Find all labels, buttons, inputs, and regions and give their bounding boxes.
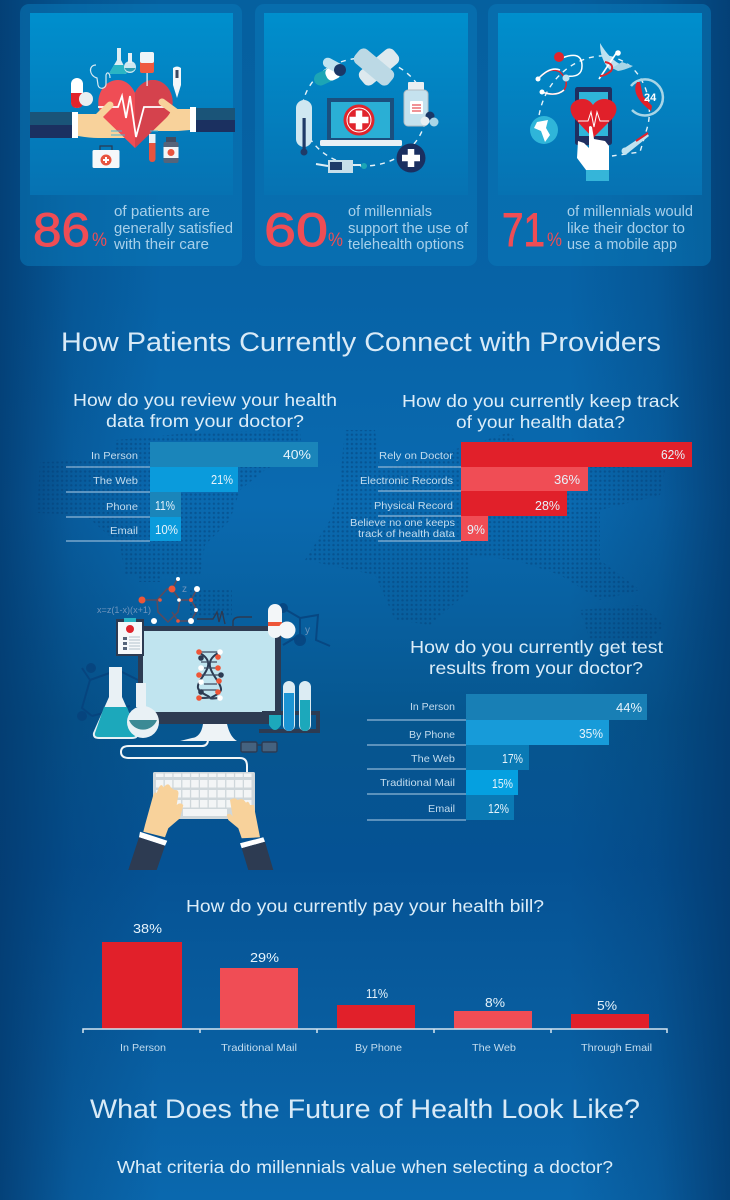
- chart: review health data: 10%: [155, 522, 178, 537]
- icon: pointing hand: [577, 126, 609, 181]
- icon: stethoscope: [90, 65, 110, 88]
- icon: bottle: [404, 82, 438, 126]
- icon: capsule and tablet: [268, 604, 296, 638]
- icon: thermometer: [622, 133, 649, 154]
- text: millennials telehealth: of millennials: [348, 204, 432, 220]
- chart: pay health bill: 5%: [597, 998, 617, 1013]
- text: millennials mobile app: of millennials would: [567, 204, 693, 220]
- icon: DNA helix: [196, 649, 224, 701]
- chart title: of your health data?: [456, 412, 625, 432]
- icon: thermometer: [173, 66, 181, 98]
- icon: test tube rack: [259, 681, 320, 733]
- text: millennials mobile app: like their doctor to: [567, 221, 685, 237]
- chart title: [410, 637, 663, 678]
- chart: get test results: Traditional Mail: [380, 777, 455, 789]
- icon: test tube: [149, 134, 156, 162]
- chart: get test results: 35%: [579, 726, 603, 741]
- chart: pay health bill: In Person: [120, 1042, 166, 1054]
- chart title: results from your doctor?: [429, 658, 643, 678]
- icon: plus badge: [396, 144, 426, 172]
- chart: keep track of health data: Believe no one keeps: [350, 517, 455, 529]
- chart title: How do you currently get test: [410, 637, 663, 657]
- icon: stethoscope: [536, 52, 582, 94]
- chart: review health data: 11%: [155, 498, 175, 513]
- icon: conical flask: [93, 667, 138, 739]
- chart: review health data: In Person: [91, 450, 138, 462]
- panel: mobile app: [488, 4, 711, 266]
- icon: phone with heart: [571, 87, 616, 145]
- chart: keep track of health data: Electronic Records: [360, 475, 453, 487]
- icon: first aid kit: [92, 146, 120, 168]
- chart: get test results: 15%: [492, 776, 513, 791]
- icon: left hand and sleeve: [128, 784, 183, 870]
- chart: keep track of health data: [350, 391, 692, 541]
- panel: telehealth: [255, 4, 477, 266]
- dotted world map: [37, 430, 665, 650]
- chart: keep track of health data: 36%: [554, 472, 580, 487]
- chart: pay health bill: The Web: [472, 1042, 516, 1054]
- chart: get test results: In Person: [410, 701, 455, 713]
- stat: 71%: %: [547, 230, 562, 251]
- chart: get test results: [367, 637, 663, 820]
- chart: pay health bill: By Phone: [355, 1042, 402, 1054]
- text: millennials telehealth: telehealth options: [348, 237, 464, 253]
- icon: flasks: [110, 48, 136, 74]
- text: patients satisfied: generally satisfied: [114, 221, 233, 237]
- chart: review health data: Email: [110, 525, 138, 537]
- text: millennials mobile app: [567, 204, 693, 253]
- chart: get test results: The Web: [411, 753, 455, 765]
- chart: review health data: [66, 390, 337, 541]
- stat: 86%: %: [92, 230, 107, 251]
- panel: satisfied patients: [20, 4, 242, 266]
- chart: pay health bill: 38%: [133, 921, 162, 936]
- icon: 24h phone: 24: [644, 92, 657, 104]
- chart: pay health bill: 11%: [366, 986, 388, 1001]
- icon: telehealth ring: [296, 46, 438, 173]
- chart: review health data: Phone: [106, 501, 138, 513]
- text: patients satisfied: of patients are: [114, 204, 210, 220]
- chart title: [402, 391, 679, 432]
- chart: keep track of health data: 28%: [535, 498, 560, 513]
- stat: 60%: [264, 203, 343, 256]
- chart: get test results: 12%: [488, 801, 509, 816]
- illustration: computer with lab equipment: [78, 577, 330, 870]
- subheading: millennial criteria: What criteria do millennials value when selecting a doctor?: [117, 1157, 613, 1177]
- chart title: [73, 390, 337, 431]
- icon: monitor: [138, 626, 281, 741]
- chart: pay health bill: 8%: [485, 995, 505, 1010]
- icon: molecule: [138, 577, 200, 624]
- axis letter y: y: [305, 625, 310, 636]
- chart: keep track of health data: 62%: [661, 447, 685, 462]
- cable: [121, 741, 247, 773]
- chart title: How do you currently pay your health bill?: [186, 896, 544, 916]
- pulse line: [197, 611, 252, 626]
- icon: right hand and sleeve: [227, 798, 273, 870]
- text: millennials telehealth: support the use of: [348, 221, 469, 237]
- chart: pay health bill: 29%: [250, 950, 279, 965]
- stat: 71%: 71: [502, 203, 545, 256]
- heading: future of health: What Does the Future of Health Look Like?: [90, 1094, 640, 1124]
- chart title: How do you currently keep track: [402, 391, 679, 411]
- icon: round flask: [127, 683, 159, 738]
- chart: get test results: Email: [428, 803, 455, 815]
- text: millennials mobile app: use a mobile app: [567, 237, 677, 253]
- icon: glasses: [241, 742, 277, 752]
- chart: get test results: By Phone: [409, 729, 455, 741]
- chart: review health data: 21%: [211, 472, 233, 487]
- text: patients satisfied: [113, 204, 233, 253]
- icon: IV bag: [140, 52, 154, 86]
- icon: thermometer: [296, 100, 312, 156]
- chart: keep track of health data: 9%: [467, 522, 485, 537]
- icon: bandage: [351, 46, 402, 88]
- chart: pay health bill: Traditional Mail: [221, 1042, 297, 1054]
- chart: pay health bill: Through Email: [581, 1042, 652, 1054]
- chart: review health data: The Web: [93, 475, 138, 487]
- chart: review health data: 40%: [283, 447, 311, 462]
- stat: 60%: %: [328, 230, 343, 251]
- chart: get test results: 17%: [502, 751, 523, 766]
- chart title: How do you review your health: [73, 390, 337, 410]
- icon: syringe: [316, 160, 367, 173]
- icon: caduceus: [599, 43, 633, 79]
- icon: pill: [71, 78, 93, 108]
- heading: how patients connect: How Patients Currently Connect with Providers: [61, 327, 661, 357]
- icon: laptop: [320, 98, 402, 146]
- text: millennials telehealth: [348, 204, 469, 253]
- chart: keep track of health data: track of health data: [358, 528, 455, 540]
- chart: get test results: 44%: [616, 700, 642, 715]
- icon: mobile health ring: [530, 43, 663, 181]
- icon: hands holding heart: [30, 48, 235, 168]
- stat: 60%: 60: [264, 203, 328, 256]
- axis letter z: z: [182, 584, 187, 595]
- stat: 86%: 86: [33, 203, 90, 256]
- chart: keep track of health data: Rely on Doctor: [379, 450, 454, 462]
- icon: keyboard: [153, 772, 255, 819]
- formula: x=z(1-x)(x+1): [97, 605, 151, 616]
- icon: clipboard: [116, 618, 144, 656]
- dark molecule backdrop: [78, 604, 330, 720]
- icon: capsules: [312, 56, 347, 88]
- text: patients satisfied: with their care: [113, 237, 209, 253]
- chart: pay health bill: [83, 896, 667, 1054]
- icon: medicine bottle: [164, 137, 178, 163]
- chart title: data from your doctor?: [106, 411, 304, 431]
- icon: globe: [530, 116, 558, 144]
- chart: keep track of health data: Physical Record: [374, 500, 453, 512]
